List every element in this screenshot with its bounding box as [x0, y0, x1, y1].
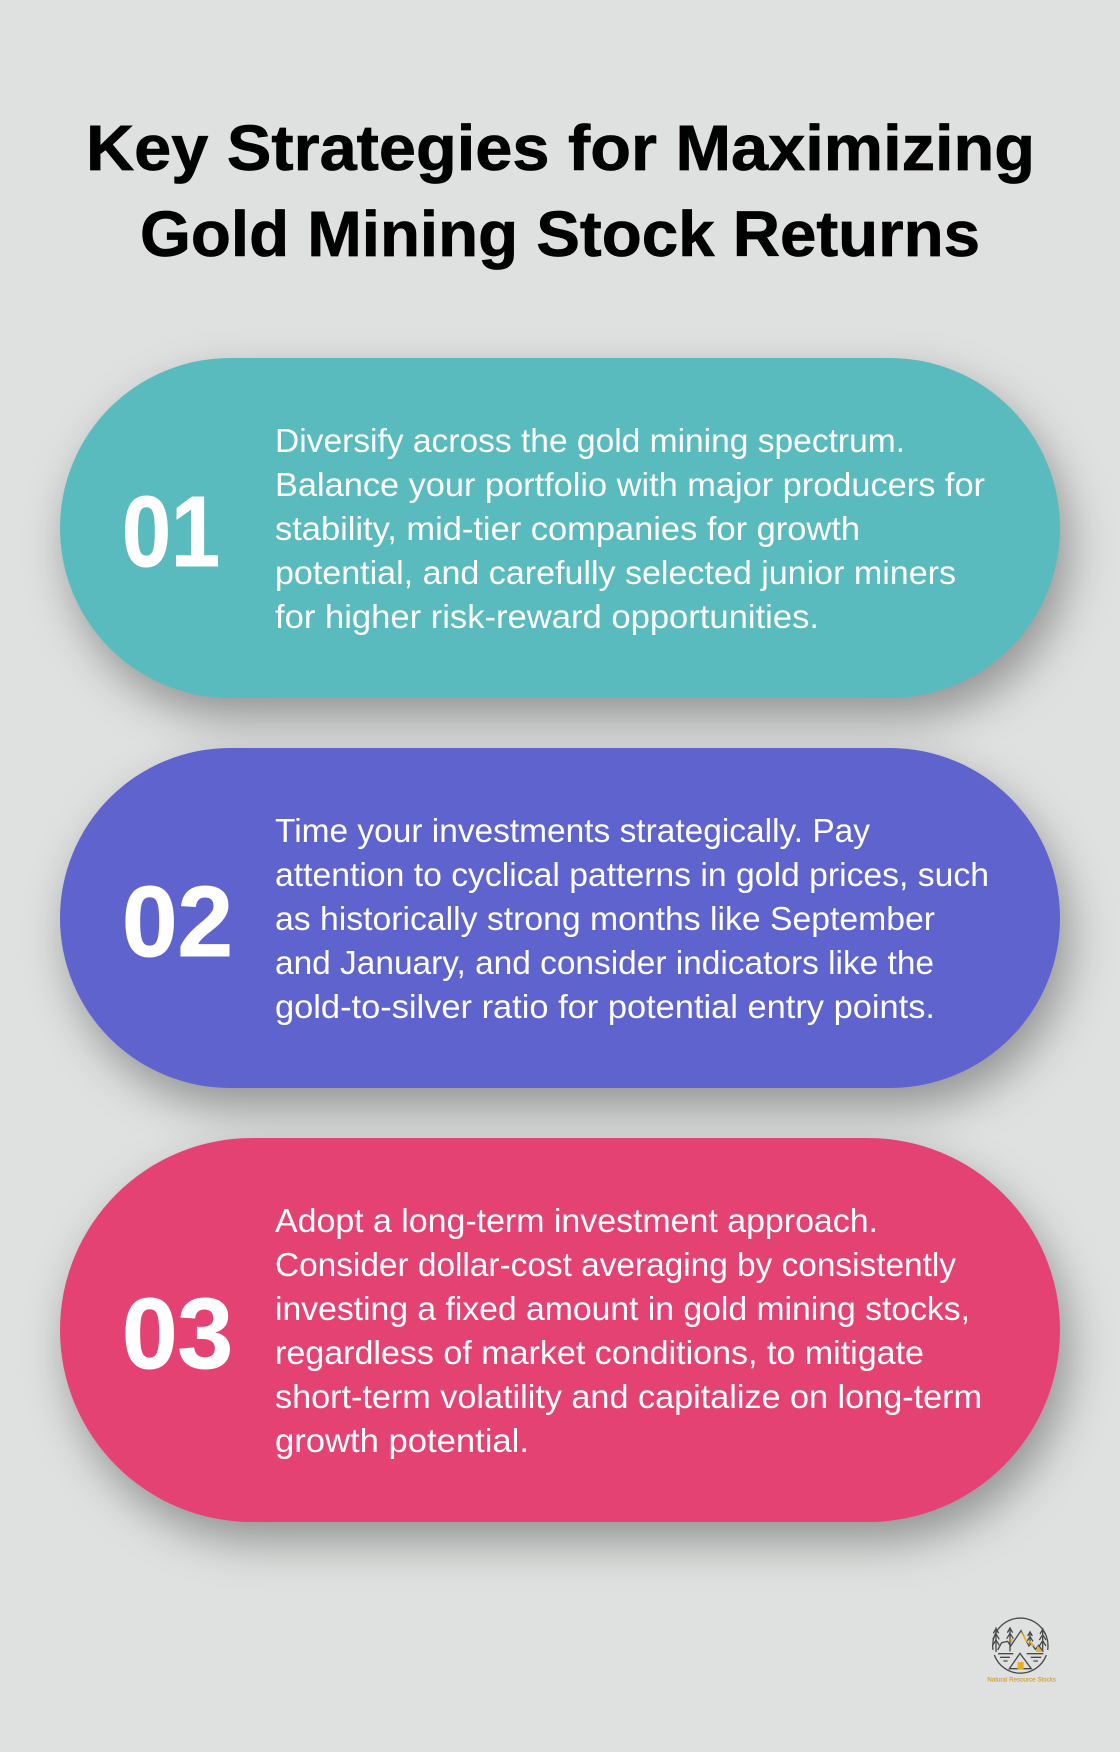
text block: diversify: for higher risk-reward opportunities.	[275, 598, 819, 635]
text block: long-term	[275, 1202, 982, 1459]
text block: diversify	[275, 422, 985, 635]
text block: diversify: potential, and carefully selected junior miners	[275, 554, 956, 591]
text block: long-term: Adopt a long-term investment approach.	[275, 1202, 878, 1239]
text block: diversify: Diversify across the gold mining spectrum.	[275, 422, 905, 459]
text block: timing: attention to cyclical patterns in gold prices, such	[275, 856, 989, 893]
title: Gold Mining Stock Returns	[140, 198, 980, 270]
panel: strategy 03 long-term	[60, 1138, 1060, 1522]
icon: Natural Resource Stocks logo	[987, 1617, 1057, 1684]
title: Key Strategies for Maximizing	[86, 112, 1035, 184]
step number 03: 03	[122, 1278, 233, 1390]
text block: timing: Time your investments strategically. Pay	[275, 812, 870, 849]
text block: long-term: investing a fixed amount in gold mining stocks,	[275, 1290, 970, 1327]
text block: timing: as historically strong months like September	[275, 900, 935, 937]
step number 01: 01	[122, 476, 220, 588]
text block: long-term: regardless of market conditions, to mitigate	[275, 1334, 924, 1371]
text block: long-term: short-term volatility and capitalize on long-term	[275, 1378, 982, 1415]
panel: strategy 01 diversify	[60, 358, 1060, 698]
text block: timing	[275, 812, 989, 1025]
title	[86, 112, 1035, 270]
text block: long-term: growth potential.	[275, 1422, 529, 1459]
text block: diversify: Balance your portfolio with major producers for	[275, 466, 985, 503]
text block: diversify: stability, mid-tier companies for growth	[275, 510, 860, 547]
panel: strategy 02 timing	[60, 748, 1060, 1088]
icon: Natural Resource Stocks logo: Natural Resource Stocks	[987, 1677, 1057, 1684]
text block: timing: gold-to-silver ratio for potential entry points.	[275, 988, 935, 1025]
text block: timing: and January, and consider indicators like the	[275, 944, 934, 981]
step number 02: 02	[122, 866, 233, 978]
text block: long-term: Consider dollar-cost averaging by consistently	[275, 1246, 956, 1283]
